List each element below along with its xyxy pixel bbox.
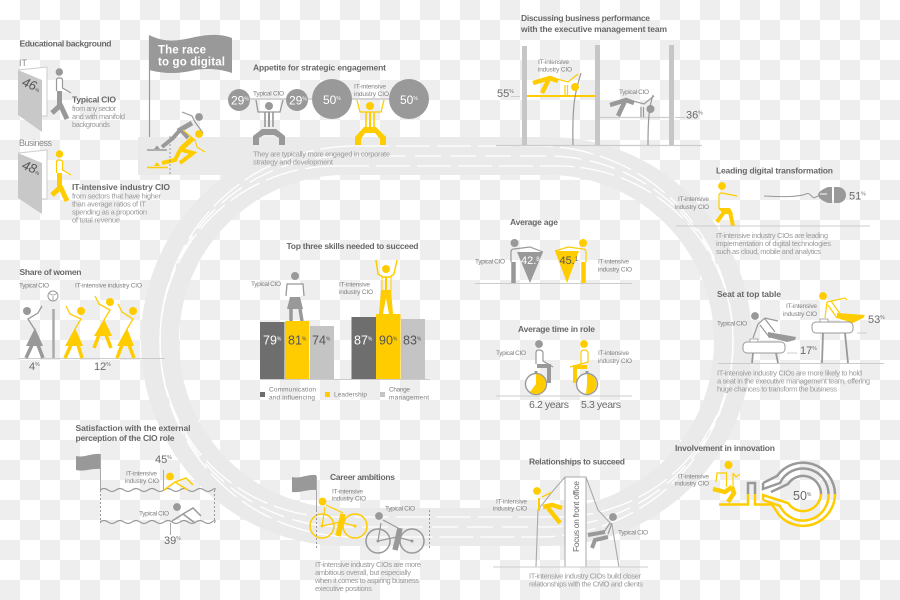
title flag: The race [158,44,206,56]
chart: skills bars: 79 [263,334,277,348]
heading: satisfaction: Satisfaction with the external [76,423,190,433]
value: 4%: 4 [29,361,35,373]
value: 51%: 51 [849,190,861,202]
label: IT-intensive climb: industry CIO [493,506,527,512]
icon: yellow cyclist [310,498,367,538]
icon: business door 48% [18,150,47,214]
value: 45%: % [167,455,172,461]
icon: yellow figure [717,182,737,226]
text: career note: when it comes to aspiring business [314,576,419,585]
icon: yellow figure on podium [376,260,397,314]
icon: yellow woman three [117,304,137,358]
chart: barbell circles: 50 [400,93,413,107]
chart: skills bars: 83 [403,334,417,348]
icon: grey sitter [535,340,553,383]
text: IT-intensive CIO: than average ratios of IT [72,200,146,208]
chart: light bulb rings: 50 [793,489,807,503]
label: typical women: Typical CIO [19,282,49,290]
heading: time in role: Average time in role [518,324,595,334]
icon: grey jumper [610,95,654,145]
icon: grey figure with triangle: 42. [521,255,536,267]
label: IT-intensive climb: IT-intensive [496,498,527,506]
panel: average time in role [496,324,632,411]
panel: involvement in innovation [675,443,835,526]
value: 55%: % [509,89,514,95]
text: typical CIO: from any sector [72,104,116,113]
panel: seat at top table [717,289,885,394]
chart: skills bars: 90 [379,334,393,348]
icon: grey woman [23,306,43,358]
label: IT-intensive seat: IT-intensive [786,303,817,310]
panel: discussing business performance [496,13,703,146]
chart: barbell circles: Typical CIO [253,90,284,98]
text: typical CIO [72,94,125,129]
icon: yellow runner [713,461,740,502]
icon: grey swimmer [172,503,201,523]
panel: relationships to succeed [493,456,648,588]
chart: barbell circles [228,79,429,119]
label: IT-intensive: IT-intensive [678,196,709,203]
chart: skills bars: % [393,336,398,342]
chart: skills bars: 74 [312,334,326,348]
label: IT-intensive career: industry CIO [332,496,366,502]
icon: IT-intensive CIO walker [52,150,71,201]
icon: grey figure on podium [286,272,304,321]
text: leading digital note: such as cloud, mobile and analytics [716,247,821,256]
icon: grey figure with triangle [510,239,543,283]
text: typical CIO: backgrounds [72,120,110,129]
chart: skills bars: % [277,336,282,342]
chart: barbell circles: % [244,96,249,102]
icon: grey pommel horse [743,312,796,363]
label: typical seat: Typical CIO [717,320,747,328]
icon: yellow climber [533,487,562,523]
label: IT-intensive age: IT-intensive [598,258,629,266]
panel: race flag and runners [147,35,232,175]
icon: volleyball [48,291,58,301]
panel: share of women [19,267,165,373]
text: relationships note: IT-intensive industry CIOs build closer [529,572,642,580]
label: IT-intensive jumper: industry CIO [538,66,572,74]
icon: typical CIO walker [52,68,71,119]
chart: skills bars: 81 [288,334,302,348]
chart: light bulb rings: % [807,492,812,498]
icon: yellow pommel horse [812,292,865,363]
legend: Communication [269,386,316,394]
icon: stopwatch 6.2 years [526,371,546,394]
heading: seat at top table: Seat at top table [717,289,781,299]
label: IT-intensive career: IT-intensive [332,488,363,496]
chart: skills bars: % [326,336,331,342]
text: appetite note [253,150,390,166]
value: 39%: % [176,536,181,542]
icon: grey figure with triangle: 8 [536,257,540,263]
value: 17%: % [812,346,817,352]
icon: IT door 46%: 46% [20,74,44,95]
chart: skills bars: % [368,336,373,342]
icon: stopwatch 5.3 years [576,371,598,394]
text: leading digital note: implementation of digital technologies [716,239,831,248]
value: 4%: % [35,362,40,368]
label: IT-intensive seat: industry CIO [783,311,817,318]
label: IT-intensive time [598,350,632,365]
value: 53%: % [880,315,885,321]
title flag [149,35,232,137]
heading: satisfaction: perception of the CIO role [76,433,175,443]
panel: educational background [18,38,170,224]
chart: barbell circles: % [302,96,307,102]
chart: water lines [100,470,215,535]
icon: mouse [764,187,846,203]
text: seat note: a seat in the executive management team, offering [717,376,870,386]
label: IT-intensive time: IT-intensive [598,350,629,357]
icon: front office tower: Focus on front office [571,481,581,552]
chart: high jump posts [496,45,702,146]
text: IT-intensive CIO: from sectors that have higher [72,192,162,200]
text: seat note: huge chances to transform the business [717,384,837,394]
text: IT-intensive CIO: spending as a proportion [72,208,147,216]
label: business: Business [19,138,52,148]
icon: grey lifter [253,100,285,145]
panel: leading digital transformation [675,166,870,256]
label: IT-intensive skills: industry CIO [339,289,373,296]
text: career note [314,560,421,593]
text: IT-intensive CIO [72,182,170,224]
legend: Change [389,386,410,394]
label: IT-intensive age [598,258,632,274]
legend: management [389,394,429,402]
text: seat note [717,368,870,394]
heading: educational background: Educational background [20,38,112,48]
text: career note: IT-intensive industry CIOs are more [315,560,421,569]
icon: yellow runner [147,130,205,168]
chart: light bulb rings [719,463,835,526]
label: typical skills: Typical CIO [251,281,281,288]
heading: involvement: Involvement in innovation [675,443,775,453]
icon: yellow figure with triangle: 1 [575,257,579,263]
label: IT: IT [19,58,28,68]
value: 17%: 17 [800,345,812,357]
label: IT-intensive skills: IT-intensive [339,282,370,288]
legend [260,386,429,402]
label: IT-intensive innovation [675,474,709,488]
text: leading digital note: IT-intensive industry CIOs are leading [716,231,828,240]
icon: yellow woman two [94,296,114,348]
value: 12%: 12 [94,361,106,373]
icon: yellow woman one [65,306,85,358]
label: typical swim: Typical CIO [139,510,169,518]
text: relationships note: relationships with the CMO and clients [529,580,643,588]
heading: satisfaction [76,423,190,443]
icon: grey cyclist [366,512,424,553]
value: 12%: % [106,362,111,368]
value: 39%: 39 [164,535,176,547]
chart: skills bars: 87 [354,334,368,348]
value: 55%: 55 [497,88,509,100]
chart: skills bars [260,314,430,380]
label: IT-intensive jumper [538,59,572,74]
icon: front office tower [536,477,619,567]
label: IT-intensive swim [125,470,159,485]
icon: yellow jumper [533,73,581,145]
label: typical career: Typical CIO [385,506,415,512]
text: career note: ambitious overall, but especially [315,568,411,577]
panel: career ambitions [292,472,430,593]
value: 36%: % [698,110,703,116]
label: IT-intensive skills [339,282,373,296]
heading: appetite: Appetite for strategic engagement [253,62,386,72]
text: IT-intensive CIO: IT-intensive industry CIO [72,182,170,192]
chart: barbell circles: 29 [231,94,244,108]
heading: leading digital: Leading digital transformation [716,166,833,176]
text: leading digital note [716,231,831,256]
label: IT-intensive jumper: IT-intensive [538,59,569,66]
text: appetite note: They are typically more engaged in corporate [253,150,390,158]
running track [138,137,733,537]
chart: skills bars: % [417,336,422,342]
chart: barbell circles: % [336,96,341,102]
value: 36%: 36 [686,110,698,122]
panel: top three skills [251,241,430,402]
label: IT-intensive women: IT-intensive industry CIO [75,282,142,290]
text: appetite note: strategy and development [253,158,334,166]
value: 6.2 years: 6.2 years [529,399,569,411]
icon: career flag [292,475,316,510]
chart: skills bars: % [302,336,307,342]
legend: Leadership [334,392,367,398]
icon: yellow figure with triangle [555,239,587,283]
text: typical CIO: Typical CIO [72,94,116,104]
value: 5.3 years: 5.3 years [581,399,621,411]
icon: satisfaction flag [76,454,100,490]
heading: career ambitions: Career ambitions [330,472,395,482]
label: IT-intensive time: industry CIO [598,358,632,365]
heading: relationships: Relationships to succeed [529,456,625,466]
label: typical age: Typical CIO [475,258,505,266]
icon: yellow swimmer [164,473,193,490]
text: career note: executive positions [315,584,372,593]
icon: business door 48%: 48% [20,157,44,178]
label: IT-intensive seat [783,303,817,318]
label: IT-intensive swim: IT-intensive [126,470,157,478]
text: relationships note [529,572,643,588]
icon: grey climber [588,513,617,548]
label: typical time: Typical CIO [496,350,526,357]
chart: barbell circles: industry CIO [354,91,389,98]
panel: appetite for strategic engagement [228,62,429,166]
heading: discussing [520,13,667,34]
label: IT-intensive climb [493,498,527,512]
label: IT-intensive [675,196,709,211]
value: 51%: % [861,192,866,198]
heading: discussing: with the executive management team [520,24,667,34]
title flag: to go digital [158,56,225,68]
chart: barbell circles: IT-intensive [354,84,386,90]
chart: barbell circles: 29 [289,94,302,108]
text: seat note: IT-intensive industry CIOs are more likely to hold [717,368,862,378]
heading: top three skills: Top three skills needed to succeed [286,241,418,251]
icon: yellow lifter [355,100,386,145]
label: typical climb: Typical CIO [618,530,648,536]
label: IT-intensive age: industry CIO [598,266,632,274]
chart: barbell circles: % [413,96,418,102]
panel: satisfaction [76,423,215,547]
heading: average age: Average age [510,217,558,227]
chart: barbell circles: 50 [323,93,336,107]
panel: average age [475,217,632,284]
label: IT-intensive innovation: IT-intensive [678,474,709,480]
icon: grey runner [147,112,203,150]
heading: share of women: Share of women [20,267,82,277]
label: IT-intensive career [332,488,366,502]
text: typical CIO: and with manifold [72,112,125,121]
icon: IT door 46% [18,67,47,132]
label: IT-intensive innovation: industry CIO [675,480,709,488]
value: 53%: 53 [868,314,880,326]
icon: yellow sitter [570,340,588,383]
legend: and influencing [269,394,315,402]
value: 45%: 45 [155,454,167,466]
heading: discussing: Discussing business performance [521,13,650,23]
icon: yellow figure with triangle: 45. [560,255,575,267]
text: IT-intensive CIO: of total revenue [72,216,120,224]
label: typical jumper: Typical CIO [619,89,649,96]
label: IT-intensive swim: industry CIO [125,478,159,485]
label: IT-intensive: industry CIO [675,204,709,211]
